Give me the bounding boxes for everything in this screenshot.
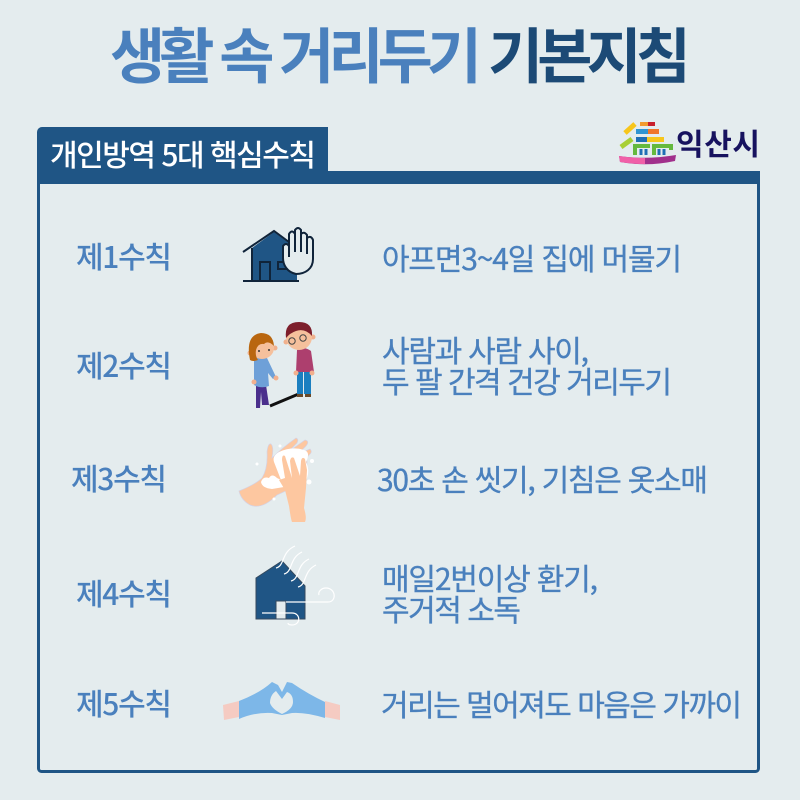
icon: two people keeping distance — [248, 322, 316, 408]
rule 4 text — [382, 555, 598, 630]
rule 2 text: 두 팔 간격 건강 거리두기 — [382, 358, 672, 402]
rule 1 label: 제1수칙 — [76, 233, 172, 277]
rule 1 text: 아프면3~4일 집에 머물기 — [382, 235, 682, 279]
logo: Iksan city: 익산시 — [676, 120, 760, 164]
panel heading: 개인방역 5대 핵심수칙 — [50, 131, 316, 175]
rule 4 label: 제4수칙 — [76, 570, 172, 614]
rule 4 text: 매일2번이상 환기, — [382, 555, 598, 599]
rule 2 text — [382, 327, 672, 402]
icon: house with stop hand — [243, 228, 313, 281]
title — [110, 9, 691, 96]
rule 2 text: 사람과 사람 사이, — [382, 327, 589, 371]
icon: gloved hands forming heart — [223, 682, 340, 720]
rule 3 label: 제3수칙 — [71, 455, 167, 499]
panel: core rules — [37, 127, 760, 772]
person right — [284, 322, 316, 397]
title: 생활 속 거리두기 — [110, 9, 482, 96]
rule 4 text: 주거적 소독 — [382, 586, 521, 630]
logo: Iksan city — [619, 120, 760, 164]
rule 3 text: 30초 손 씻기, 기침은 옷소매 — [377, 456, 708, 500]
title: 기본지침 — [488, 9, 691, 96]
icon: washing hands with soap — [239, 438, 314, 522]
rule 2 label: 제2수칙 — [76, 342, 172, 386]
icon: ventilating house — [256, 546, 334, 625]
rule 5 text: 거리는 멀어져도 마음은 가까이 — [381, 681, 742, 725]
person left — [248, 333, 278, 408]
rule 5 label: 제5수칙 — [76, 680, 172, 724]
